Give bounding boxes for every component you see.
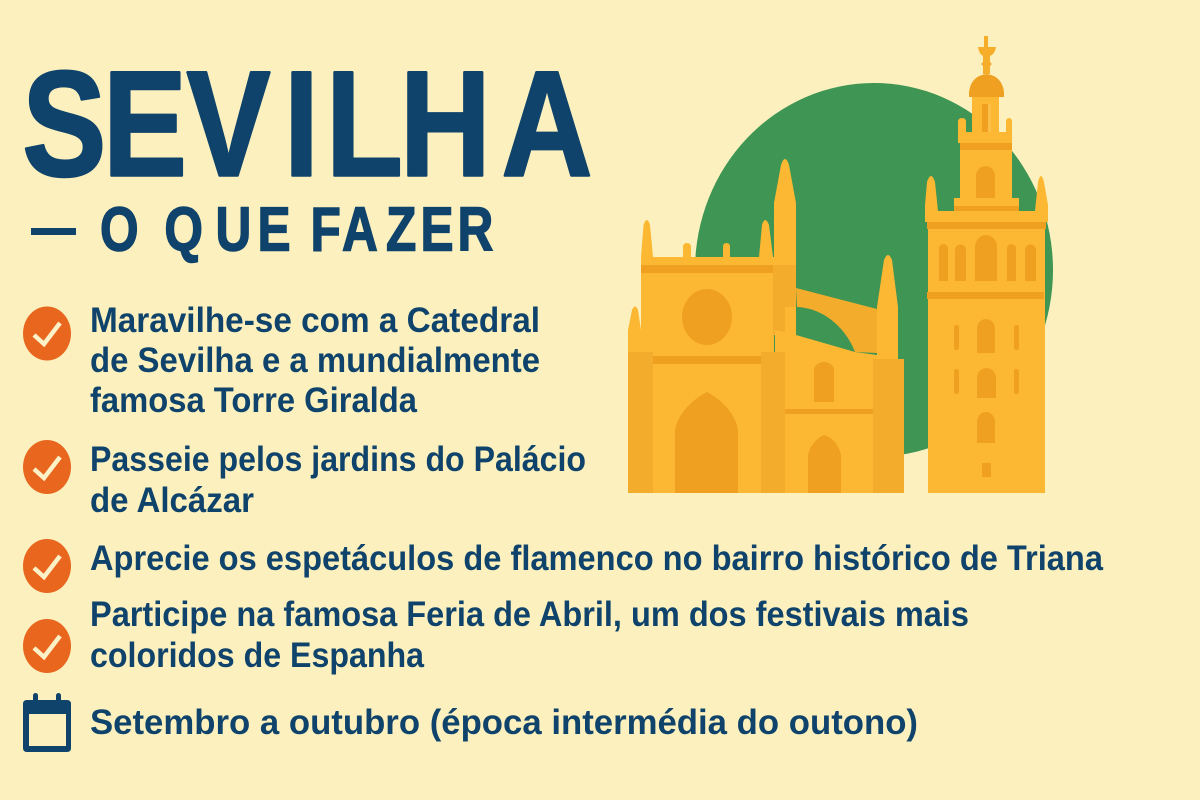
icon: calendar (23, 693, 71, 752)
upper windows (939, 244, 948, 281)
icon: check (23, 306, 71, 360)
Giralda tower (925, 36, 1048, 493)
text: Feria de Abril (90, 595, 969, 675)
text: season: Setembro a outubro (época intermédia do outono) (90, 703, 918, 742)
icon: check (23, 539, 71, 593)
illustration: Seville cathedral and Giralda (628, 36, 1053, 493)
finial (978, 36, 996, 74)
lower windows (977, 319, 995, 353)
text: cathedral: de Sevilha e a mundialmente (90, 341, 540, 380)
checklist item 2 (23, 440, 586, 520)
flying buttress (796, 288, 877, 353)
text: cathedral: Maravilhe-se com a Catedral (90, 301, 540, 340)
icon: check (23, 440, 71, 494)
best time to visit (23, 693, 918, 752)
checklist item 1 (23, 301, 540, 420)
dome (969, 74, 1004, 97)
text: Alcázar (90, 440, 586, 520)
subtitle: O QUE FAZER (100, 194, 493, 264)
text: Feria de Abril: coloridos de Espanha (90, 636, 424, 675)
text: cathedral: famosa Torre Giralda (90, 381, 417, 420)
title: SEVILHA (22, 41, 592, 208)
text: Alcázar: Passeie pelos jardins do Palácio (90, 440, 586, 479)
nave (775, 330, 877, 493)
cathedral (628, 159, 904, 493)
right spire (877, 255, 898, 360)
text: Feria de Abril: Participe na famosa Feria de Abril, um dos festivais mais (90, 595, 969, 634)
text: Alcázar: de Alcázar (90, 481, 254, 520)
text: flamenco: Aprecie os espetáculos de flamenco no bairro histórico de Triana (90, 539, 1103, 578)
tall spire (774, 159, 796, 335)
text: cathedral (90, 301, 540, 420)
green circle backdrop (695, 83, 1053, 457)
checklist item 4 (23, 595, 969, 675)
checklist item 3 (23, 539, 1103, 593)
belfry (954, 198, 1019, 211)
icon: check (23, 619, 71, 673)
